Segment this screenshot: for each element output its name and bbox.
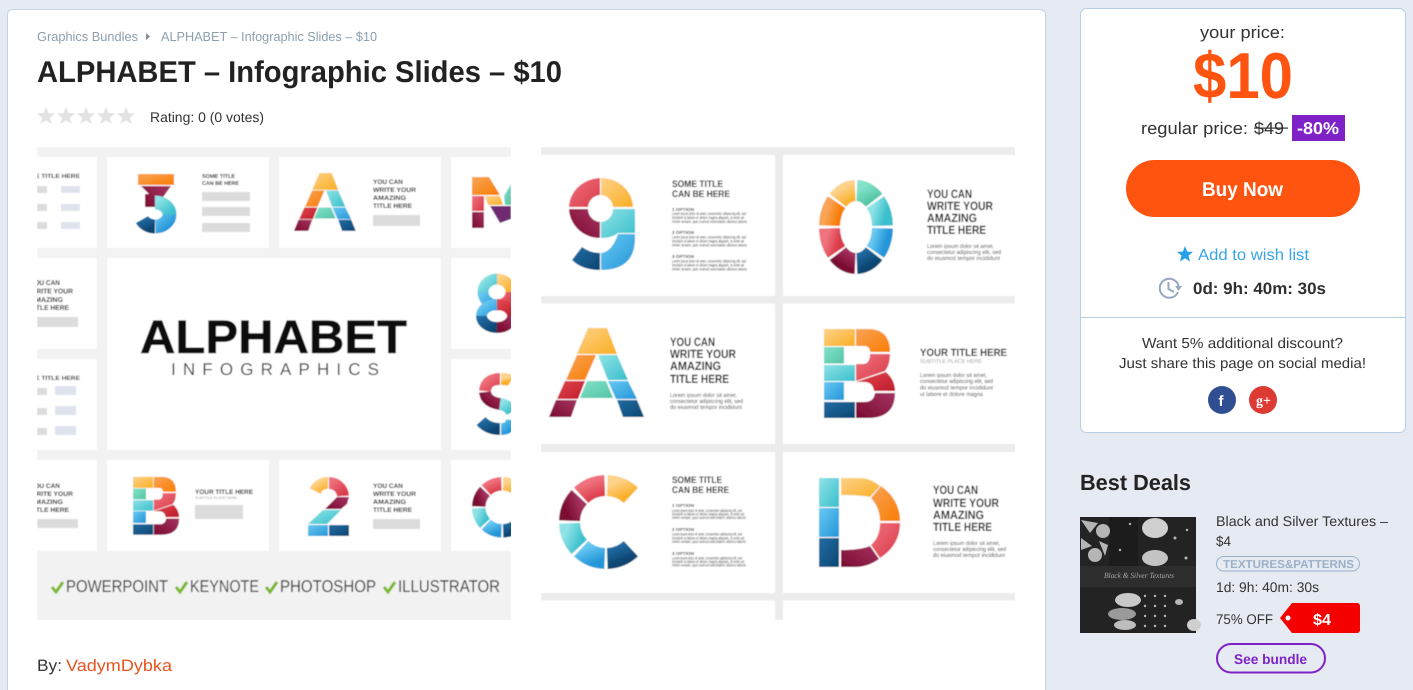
slide: partial title left 3: TITLE HERE: [30, 507, 70, 514]
software format list: [50, 580, 500, 595]
slide: cover title: INFOGRAPHICS: [171, 360, 379, 379]
text: you can write: YOU CAN: [670, 335, 715, 349]
text: you can write: AMAZING: [933, 508, 984, 522]
text: some title: tincidunt ut labore et dolore magna aliquam, ut enim ad: [672, 215, 744, 220]
slide: partial options left: [37, 173, 80, 230]
text: some title: Lorem ipsum dolor sit amet, consectetur adipiscing elit, sed: [672, 234, 746, 240]
buy now button: Buy Now: [1202, 179, 1283, 201]
your price label: your price:: [1200, 23, 1285, 42]
share discount text: Just share this page on social media!: [1119, 356, 1366, 372]
deal thumbnail: [1080, 517, 1201, 633]
text: some title: 2 OPTION: [672, 527, 694, 532]
slide: letter M: [472, 177, 511, 228]
text: some title: CAN BE HERE: [672, 189, 730, 200]
text: you can write: Lorem ipsum dolor sit amet,: [933, 540, 1000, 547]
slide: letter B: YOUR TITLE HERE: [195, 489, 254, 496]
slide: letter C large: [570, 475, 746, 568]
breadcrumb: [37, 29, 377, 44]
slide: cover title: ALPHABET: [140, 310, 407, 363]
text: you can write: do eiusmod tempor incididunt: [670, 404, 742, 411]
panel: best deals: [1080, 470, 1388, 672]
slide: partial options left 2: [37, 375, 80, 436]
discount text: 75% OFF: [1216, 611, 1273, 627]
text: some title: 3 OPTION: [672, 551, 694, 556]
slide: partial title left: TITLE HERE: [30, 305, 69, 312]
text: some title: Lorem ipsum dolor sit amet, consectetur adipiscing elit, sed: [672, 508, 742, 513]
panel: product details: [8, 10, 1046, 690]
text: you can write: [933, 483, 1006, 559]
rating stars: [37, 107, 135, 124]
slide: partial title left: YOU CAN: [30, 280, 60, 287]
share discount text: Want 5% additional discount?: [1142, 336, 1343, 352]
icon: google plus: g+: [1256, 394, 1271, 409]
text: some title: tincidunt ut labore et dolore magna aliquam, ut enim ad: [672, 536, 744, 540]
text: you can write: TITLE HERE: [933, 520, 992, 534]
text: some title: SOME TITLE: [672, 475, 722, 486]
slide: partial title left: [37, 280, 78, 328]
slide: number 3: CAN BE HERE: [202, 181, 239, 187]
category tag: TEXTURES&PATTERNS: [1223, 559, 1354, 571]
author: VadymDybka: [66, 657, 173, 675]
text: your title: do eiusmod tempor incididunt: [920, 384, 993, 392]
deal countdown: 1d: 9h: 40m: 30s: [1216, 579, 1319, 595]
text: some title: SOME TITLE: [672, 179, 723, 190]
text: some title: 3 OPTION: [672, 254, 694, 259]
text: you can write: consectetur adipiscing elit, sed: [670, 398, 743, 405]
text: you can write: [670, 335, 743, 411]
discount badge: [1292, 115, 1345, 141]
text: some title: minim veniam, quis nostrud exercitation ullamco laboris: [672, 242, 747, 248]
text: your title: [920, 347, 1007, 398]
slide: number 2: AMAZING: [373, 499, 406, 506]
thumbnail slides: [20, 157, 521, 551]
discount badge: -80%: [1297, 119, 1339, 138]
price tag: [1280, 603, 1360, 633]
text: some title: 1 OPTION: [672, 503, 694, 508]
text: some title: 2 OPTION: [672, 230, 694, 235]
slide: number 2: WRITE YOUR: [373, 491, 416, 498]
slide: partial title left 3: YOU CAN: [30, 483, 60, 490]
wish list link: Add to wish list: [1198, 247, 1310, 264]
text: you can write: TITLE HERE: [670, 372, 729, 386]
text: some title: Lorem ipsum dolor sit amet, consectetur adipiscing elit, sed: [672, 258, 746, 264]
price tag: $4: [1313, 612, 1331, 629]
slide: partial title left 3: AMAZING: [30, 499, 63, 506]
text: some title: [672, 179, 747, 272]
heading: Best Deals: [1080, 470, 1191, 495]
slide: partial options left: SOME TITLE HERE: [20, 173, 80, 180]
text: you can write: Lorem ipsum dolor sit amet,: [927, 243, 994, 250]
title: ALPHABET – Infographic Slides – $10: [37, 56, 562, 89]
software format list: PHOTOSHOP: [280, 577, 376, 596]
slide: letter B large: [824, 329, 1007, 418]
text: some title: [672, 475, 746, 568]
text: you can write: AMAZING: [927, 211, 977, 225]
slide: partial title left: AMAZING: [30, 297, 64, 304]
see bundle button: [1217, 644, 1325, 672]
text: some title: minim veniam, quis nostrud exercitation ullamco laboris: [672, 266, 747, 272]
icon: google plus: [1249, 386, 1277, 414]
slide: letter B: SUBTITLE PLACE HERE: [195, 496, 238, 500]
slide: partial title left 3: WRITE YOUR: [30, 491, 73, 498]
text: some title: Lorem ipsum dolor sit amet, consectetur adipiscing elit, sed: [672, 211, 746, 216]
author: By:: [37, 657, 62, 675]
slide: number 2: YOU CAN: [373, 483, 403, 490]
slide: number 0: [830, 187, 1001, 264]
text: you can write: WRITE YOUR: [670, 347, 736, 361]
slide: number 2: [308, 483, 420, 536]
text: you can write: consectetur adipiscing elit, sed: [933, 546, 1006, 553]
text: some title: tincidunt ut labore et dolore magna aliquam, ut enim ad: [672, 512, 744, 516]
slide: cover title: [140, 320, 408, 376]
slide: partial title left: WRITE YOUR: [30, 288, 73, 296]
text: some title: tincidunt ut labore et dolore magna aliquam, ut enim ad: [672, 559, 744, 564]
slide: number 9: [569, 178, 747, 272]
slide: letter S: [481, 379, 512, 429]
text: you can write: consectetur adipiscing elit, sed: [927, 249, 1001, 256]
slide: letter D large: [819, 478, 1006, 567]
deal title: Black and Silver Textures –: [1216, 513, 1388, 529]
text: you can write: [927, 187, 1001, 262]
see bundle button: See bundle: [1234, 651, 1307, 667]
slide: letter A: [294, 173, 420, 231]
rating text: Rating: 0 (0 votes): [150, 109, 264, 125]
slide: number 8: [482, 279, 512, 328]
regular price: [1141, 119, 1288, 138]
text: some title: minim veniam, quis nostrud exercitation ullamco laboris: [672, 515, 746, 520]
software format list: KEYNOTE: [190, 577, 259, 596]
text: your title: SUBTITLE PLACE HERE: [920, 359, 982, 365]
text: you can write: WRITE YOUR: [933, 496, 999, 510]
breadcrumb: ALPHABET – Infographic Slides – $10: [161, 29, 377, 44]
text: some title: 1 OPTION: [672, 207, 694, 212]
software format list: ILLUSTRATOR: [398, 577, 500, 596]
text: some title: minim veniam, quis nostrud exercitation ullamco laboris: [672, 219, 747, 224]
countdown timer: 0d: 9h: 40m: 30s: [1193, 280, 1326, 298]
panel: price box: [1080, 8, 1406, 432]
text: you can write: TITLE HERE: [927, 223, 986, 237]
text: some title: tincidunt ut labore et dolore magna aliquam, ut enim ad: [672, 262, 744, 268]
slide: partial options left 2: SOME TITLE HERE: [20, 375, 80, 382]
slide: number 3: [138, 174, 250, 232]
text: you can write: AMAZING: [670, 359, 721, 373]
text: you can write: do eiusmod tempor incididunt: [927, 255, 1000, 262]
slide: letter B: [133, 477, 254, 535]
text: you can write: WRITE YOUR: [927, 199, 993, 213]
slide: letter A large: [549, 328, 743, 417]
slide: partial title left 3: [37, 482, 78, 528]
deal title: [1216, 513, 1388, 549]
text: your title: YOUR TITLE HERE: [920, 347, 1007, 359]
software format list: POWERPOINT: [66, 577, 168, 596]
buy now button: [1126, 160, 1360, 217]
slide: letter A: YOU CAN: [373, 179, 403, 186]
regular price: $49: [1254, 119, 1284, 138]
text: you can write: YOU CAN: [933, 483, 978, 497]
text: some title: tincidunt ut labore et dolore magna aliquam, ut enim ad: [672, 238, 744, 244]
slide: number 3: SOME TITLE: [202, 174, 235, 180]
slide: letter A: TITLE HERE: [373, 203, 413, 210]
text: some title: minim veniam, quis nostrud exercitation ullamco laboris: [672, 562, 746, 568]
preview image: slide collage: [20, 147, 521, 620]
price: $10: [1193, 39, 1293, 112]
text: your title: Lorem ipsum dolor sit amet,: [920, 372, 987, 379]
share discount text: [1119, 336, 1366, 372]
regular price: regular price:: [1141, 119, 1248, 138]
slide: letter C: [479, 484, 518, 531]
icon: facebook: f: [1218, 393, 1224, 410]
preview image: large letter slides: [541, 147, 1015, 620]
slide: letter A: WRITE YOUR: [373, 187, 416, 194]
text: your title: consectetur adipiscing elit, sed: [920, 378, 993, 385]
text: you can write: do eiusmod tempor incididunt: [933, 552, 1005, 559]
text: your title: ut labore et dolore magna: [920, 391, 984, 398]
text: some title: Lorem ipsum dolor sit amet, consectetur adipiscing elit, sed: [672, 532, 742, 536]
deal title: $4: [1216, 533, 1231, 549]
text: some title: CAN BE HERE: [672, 485, 729, 496]
deal thumbnail: Black & Silver Textures: [1104, 571, 1174, 580]
text: some title: minim veniam, quis nostrud exercitation ullamco laboris: [672, 539, 746, 544]
text: you can write: Lorem ipsum dolor sit amet,: [670, 392, 737, 399]
breadcrumb: Graphics Bundles: [37, 29, 138, 44]
slide: letter A: AMAZING: [373, 195, 406, 202]
text: some title: Lorem ipsum dolor sit amet, consectetur adipiscing elit, sed: [672, 556, 742, 560]
icon: facebook: [1208, 386, 1236, 414]
slide: number 2: TITLE HERE: [373, 507, 413, 514]
text: you can write: YOU CAN: [927, 187, 972, 201]
